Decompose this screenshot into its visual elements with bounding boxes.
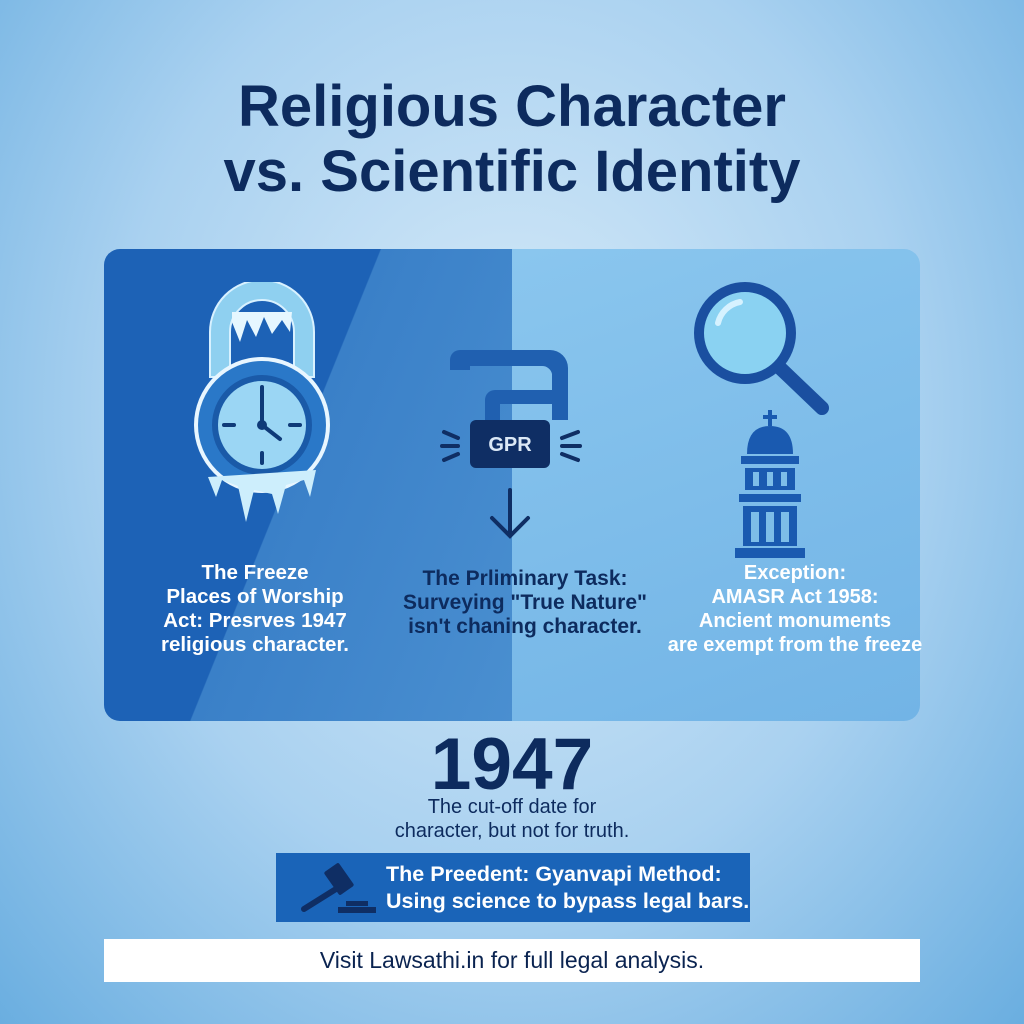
panel: right exception xyxy=(512,249,920,721)
footer banner xyxy=(104,939,920,982)
title: vs. Scientific Identity xyxy=(224,139,800,204)
text: precedent xyxy=(386,862,749,913)
icon: monument xyxy=(735,410,805,558)
text: cut-off caption: The cut-off date for xyxy=(428,796,596,818)
text: freeze xyxy=(161,561,349,656)
text: freeze: The Freeze xyxy=(201,561,309,584)
panel: left freeze xyxy=(104,249,514,721)
text: exception: Ancient monuments xyxy=(699,610,891,632)
icon: GPR scanner: GPR xyxy=(488,434,532,456)
text: freeze: religious character. xyxy=(161,633,349,656)
callout: precedent xyxy=(276,853,750,922)
icon: frozen clock lock xyxy=(194,282,330,522)
text: preliminary task: Surveying "True Nature" xyxy=(403,591,647,614)
text: precedent: The Preedent: Gyanvapi Method: xyxy=(386,862,722,886)
text: exception: are exempt from the freeze xyxy=(668,634,922,656)
stat: 1947: 1947 xyxy=(431,724,593,805)
text: preliminary task: The Prliminary Task: xyxy=(422,567,628,590)
text: precedent: Using science to bypass legal bars. xyxy=(386,889,749,913)
text: exception: Exception: xyxy=(744,562,846,584)
icon: GPR scanner xyxy=(440,350,582,539)
text: preliminary task xyxy=(403,567,647,638)
text: freeze: Places of Worship xyxy=(166,585,344,608)
text: exception: AMASR Act 1958: xyxy=(711,586,879,608)
footer banner: Visit Lawsathi.in for full legal analysis. xyxy=(320,947,704,973)
text: cut-off caption xyxy=(395,796,629,842)
text: preliminary task: isn't chaning character. xyxy=(408,615,642,638)
text: exception xyxy=(668,562,922,656)
text: cut-off caption: character, but not for truth. xyxy=(395,820,629,842)
title: Religious Character xyxy=(238,74,786,139)
text: freeze: Act: Presrves 1947 xyxy=(163,609,347,632)
icon: gavel xyxy=(301,863,376,913)
title xyxy=(224,74,800,204)
icon: magnifying glass xyxy=(694,282,829,415)
